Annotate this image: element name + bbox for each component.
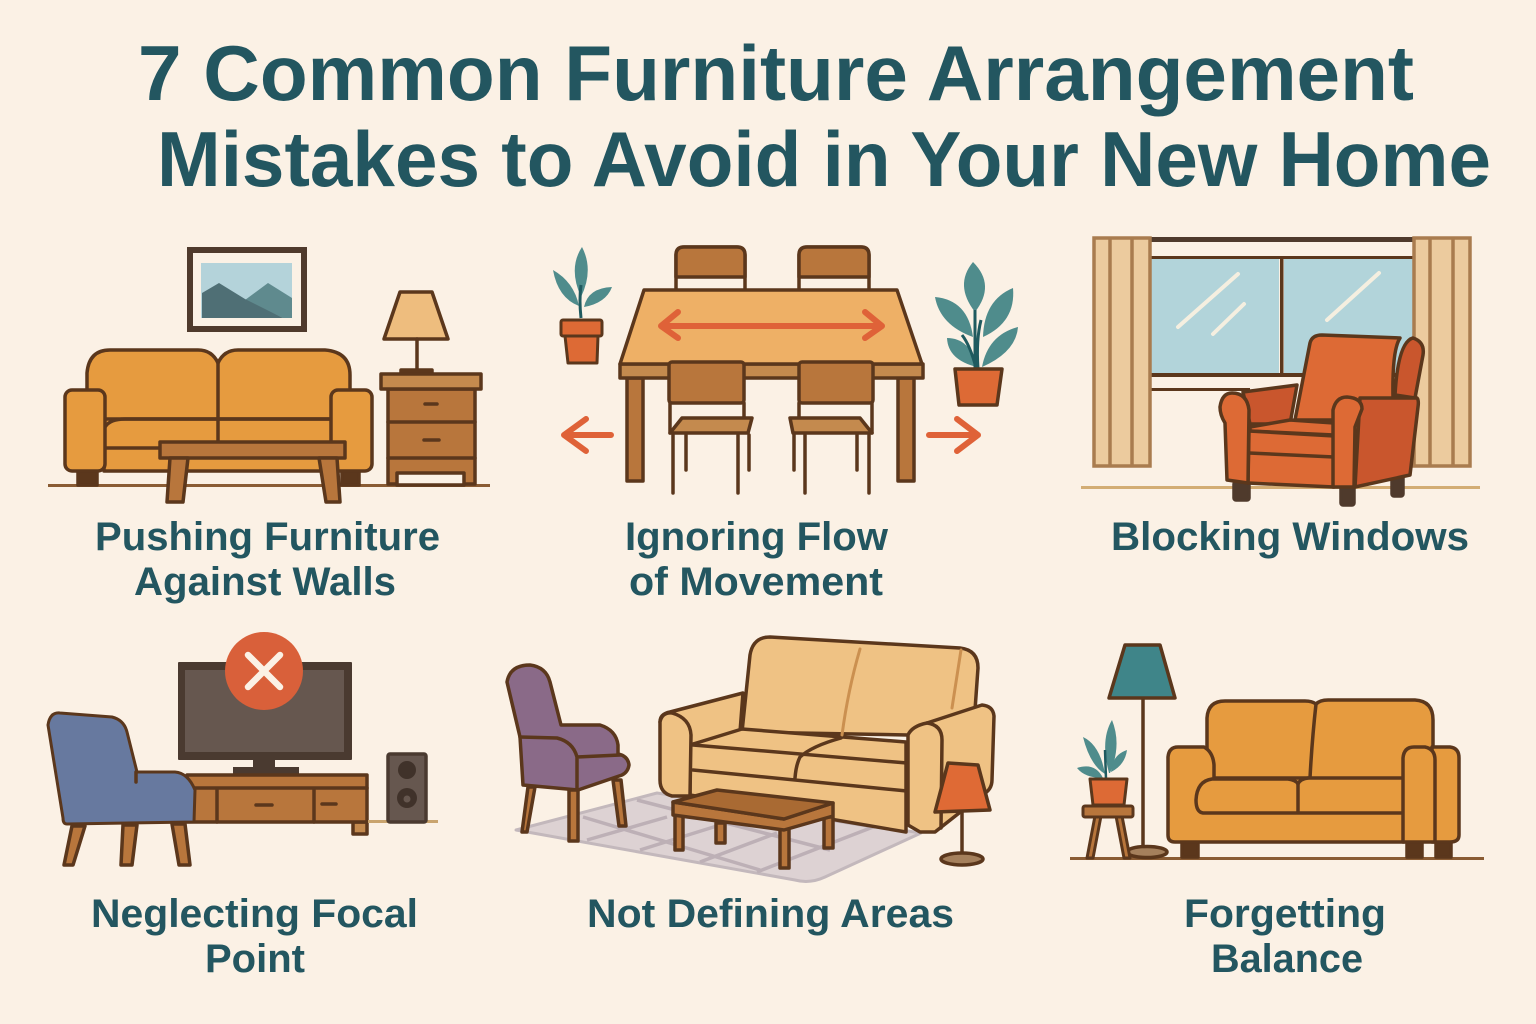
label: Not Defining Areas [587,892,954,936]
icon: back chairs [676,247,869,292]
panel: neglecting focal point [48,632,438,981]
panel: blocking windows [1081,237,1480,559]
label: of Movement [629,560,883,604]
icon: right plant [935,262,1018,405]
icon: coffee table [673,790,833,868]
panel: forgetting balance [1070,645,1484,981]
icon: television [178,662,352,776]
arrow: across table [661,312,882,338]
icon: red x badge [225,632,303,710]
panel: ignoring flow of movement [553,247,1018,604]
label: Forgetting [1184,892,1386,936]
title: 7 Common Furniture Arrangement [138,29,1414,117]
icon: speaker [388,754,426,822]
icon: rug [516,793,921,881]
label: Neglecting Focal [91,892,418,936]
icon: right curtain [1414,238,1470,466]
icon: front chairs [669,362,873,493]
panel: pushing furniture against walls [48,250,490,604]
icon: tv console [187,775,367,834]
icon: dining table [620,290,923,481]
icon: table lamp [384,292,448,373]
icon: small lamp [935,763,990,865]
label: Blocking Windows [1111,515,1469,559]
arrow: left [564,419,611,451]
icon: large sofa [660,635,994,832]
label: Pushing Furniture [95,515,440,559]
icon: orange sofa [1168,700,1459,857]
icon: coffee table [160,442,345,502]
label: Ignoring Flow [625,515,889,559]
title: Mistakes to Avoid in Your New Home [157,115,1491,203]
label: Point [205,937,305,981]
label: Against Walls [134,560,396,604]
icon: small plant on stool [1077,720,1133,858]
icon: floor lamp [1109,645,1175,858]
icon: sofa against wall [65,350,372,485]
label: Balance [1211,937,1363,981]
icon: purple armchair [507,665,629,841]
arrow: right [929,419,978,451]
icon: blue armchair [48,713,195,865]
title [138,29,1491,203]
icon: left plant [553,247,612,363]
icon: nightstand [381,374,481,485]
label [1184,892,1386,981]
label [625,515,889,604]
panel: not defining areas [507,635,994,936]
icon: framed picture [190,250,304,329]
icon: armchair [1220,335,1423,505]
label [91,892,418,981]
icon: window [1150,237,1413,391]
label [95,515,440,604]
icon: left curtain [1094,238,1150,466]
